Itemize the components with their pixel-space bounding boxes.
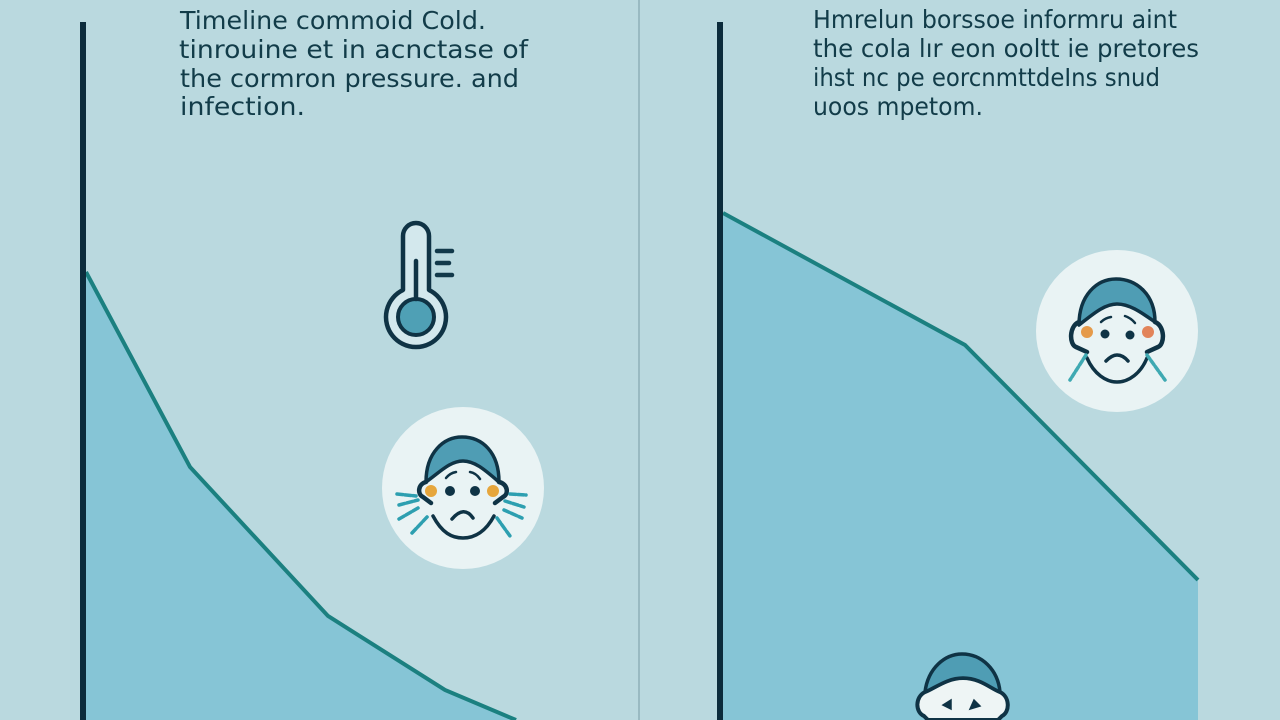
right area chart: [723, 213, 1198, 720]
left vertical axis: [80, 22, 86, 720]
right text block: uoos mpetom.: [813, 92, 983, 121]
icon: thermometer: [386, 223, 452, 347]
left text block: tinrouine et in acnctase of: [179, 35, 529, 64]
right text block: Hmrelun borssoe informru aint: [813, 5, 1177, 34]
right text block: the cola lır eon ooltt ie pretores: [813, 34, 1199, 63]
panel: left timeline: [80, 6, 544, 720]
icon: sneezing face: [382, 407, 544, 569]
right vertical axis: [717, 22, 723, 720]
left text block: Timeline commoid Cold.: [179, 6, 486, 35]
left text block: infection.: [180, 92, 305, 121]
left text block: [179, 6, 529, 121]
left area chart: [86, 272, 516, 720]
panel: right timeline: [717, 5, 1199, 720]
icon: crying face: [1036, 250, 1198, 412]
right text block: ihst nc pe eorcnmttdeIns snud: [813, 63, 1160, 92]
left text block: the cormron pressure. and: [180, 64, 519, 93]
right text block: [813, 5, 1199, 121]
icon: partial face at bottom: [917, 654, 1008, 720]
